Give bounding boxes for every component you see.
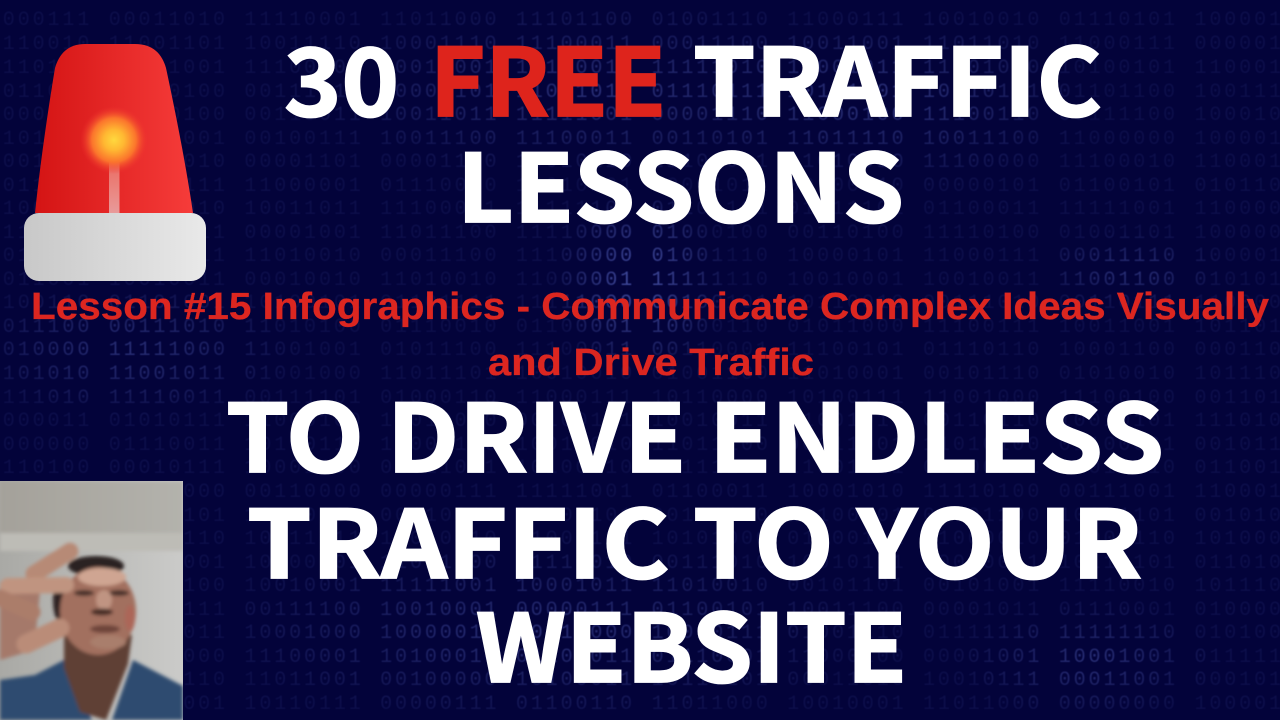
- headline: 30 FREE TRAFFIC: TRAFFIC: [693, 8, 1102, 144]
- photo face details: [74, 568, 135, 649]
- subtitle: lesson 15 description: [31, 286, 1269, 384]
- photo ceiling and molding: [0, 481, 183, 551]
- subtitle: lesson 15 description: and Drive Traffic: [488, 342, 814, 384]
- photo hair and ear: [53, 556, 124, 622]
- headline: LESSONS: LESSONS: [457, 114, 904, 250]
- headline: 30 FREE TRAFFIC: [284, 8, 1102, 144]
- highlighted word FREE: FREE: [430, 8, 666, 144]
- headline: TRAFFIC TO YOUR: TRAFFIC TO YOUR: [247, 470, 1142, 606]
- headline: TO DRIVE ENDLESS: TO DRIVE ENDLESS: [226, 364, 1164, 500]
- photo head: [60, 567, 136, 655]
- siren dome: [35, 44, 193, 213]
- icon: red siren light: [24, 44, 206, 281]
- photo: presenter saluting and looking up: [0, 481, 183, 720]
- subtitle: lesson 15 description: Lesson #15 Infographics - Communicate Complex Ideas Visually: [31, 286, 1269, 328]
- photo neck: [64, 635, 132, 720]
- siren light stem: [109, 155, 120, 213]
- photo shirt: [0, 660, 183, 720]
- headline: WEBSITE: WEBSITE: [476, 574, 907, 710]
- siren base: [24, 213, 206, 281]
- headline: 30 FREE TRAFFIC: 30: [284, 8, 399, 144]
- photo hand and fingers: [0, 551, 70, 660]
- siren glowing lamp: [80, 106, 148, 174]
